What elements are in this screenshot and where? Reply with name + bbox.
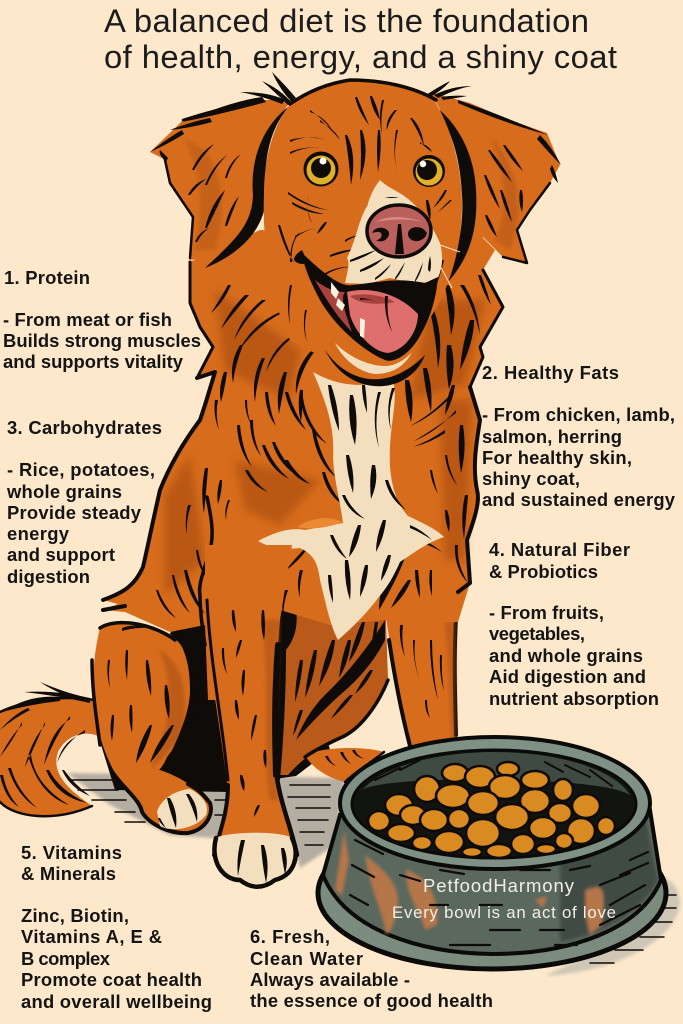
text: 5. Vitamins and Minerals: Zinc, Biotin, [21,905,129,926]
chest white patch [258,372,444,640]
fur strokes [156,392,468,622]
text: 6. Fresh, Clean Water: Clean Water [250,948,363,969]
tail [0,682,98,816]
mouth interior [315,280,352,332]
muzzle [345,180,460,288]
left eye [304,152,338,186]
teeth [331,282,365,338]
back paw [113,770,211,833]
text: 4. Natural Fiber and Probiotics: Aid digestion and [489,666,646,687]
text: 2. Healthy Fats: For healthy skin, [482,447,632,468]
title: of health, energy, and a shiny coat [104,38,617,75]
text: 6. Fresh, Clean Water [250,926,493,1011]
text: 2. Healthy Fats: 2. Healthy Fats [482,362,619,383]
text: 4. Natural Fiber and Probiotics: nutrient absorption [489,688,659,709]
text: 3. Carbohydrates: digestion [7,566,90,587]
text: 4. Natural Fiber and Probiotics: 4. Natural Fiber [489,539,630,560]
text: 2. Healthy Fats: salmon, herring [482,426,622,447]
text: 3. Carbohydrates: Provide steady [7,502,142,523]
text: 3. Carbohydrates: 3. Carbohydrates [7,417,162,438]
text: 1. Protein: Builds strong muscles [3,330,201,351]
belly [272,590,388,780]
title [104,2,617,75]
forehead and cheek fur [278,96,452,342]
body shading [165,290,485,595]
haunch [92,623,197,782]
nose [367,205,431,257]
title: A balanced diet is the foundation [104,2,589,39]
ears [150,92,561,282]
tongue [347,290,418,353]
bowl interior [352,750,636,858]
text: 1. Protein: - From meat or fish [3,309,172,330]
text: 2. Healthy Fats: - From chicken, lamb, [482,404,675,425]
bowl wall [323,810,661,954]
text: 3. Carbohydrates: and support [7,544,115,565]
text: 5. Vitamins and Minerals: 5. Vitamins [21,842,122,863]
text: 5. Vitamins and Minerals: Vitamins A, E & [21,926,162,947]
text: 3. Carbohydrates: energy [7,523,70,544]
bowl base flange [318,817,666,969]
text: 4. Natural Fiber and Probiotics: - From fruits, [489,602,604,623]
text: 3. Carbohydrates: - Rice, potatoes, [7,459,155,480]
text: 4. Natural Fiber and Probiotics: vegetables, [489,623,585,644]
text: 5. Vitamins and Minerals [21,842,212,1012]
hind foot right [305,748,384,782]
text: 1. Protein: and supports vitality [3,351,184,372]
text: 5. Vitamins and Minerals: Promote coat health [21,969,202,990]
text: 3. Carbohydrates: whole grains [6,481,122,502]
bowl brand name: PetfoodHarmony [423,875,575,896]
text: 1. Protein [3,267,201,372]
right ear [430,92,561,282]
text: 6. Fresh, Clean Water: Always available - [250,969,410,990]
head [240,72,472,372]
text: 2. Healthy Fats: and sustained energy [482,489,676,510]
right front leg [385,590,458,748]
text: 5. Vitamins and Minerals: B complex [21,948,111,969]
text: 4. Natural Fiber and Probiotics: & Probiotics [489,561,598,582]
black shadow under body [98,600,330,792]
text: 4. Natural Fiber and Probiotics: and whole grains [489,645,643,666]
torso and neck ruff [103,230,503,700]
chin fur [325,343,425,386]
text: 2. Healthy Fats: shiny coat, [482,468,580,489]
bowl tagline: Every bowl is an act of love [392,903,616,922]
text: 3. Carbohydrates [6,417,162,587]
text: 2. Healthy Fats [482,362,676,510]
front paw [214,833,296,887]
text: 5. Vitamins and Minerals: & Minerals [21,863,116,884]
right eye [413,155,445,187]
text: 6. Fresh, Clean Water: 6. Fresh, [250,926,330,947]
bowl rim [340,737,650,869]
floor shadow [67,773,680,976]
left ear [150,97,292,268]
kibble [368,762,615,858]
food bowl [318,737,666,969]
front left leg [205,545,297,860]
text: 5. Vitamins and Minerals: and overall wellbeing [21,991,212,1012]
open mouth [301,252,438,361]
text: 1. Protein: 1. Protein [4,267,90,288]
text: 6. Fresh, Clean Water: the essence of good health [250,990,493,1011]
text: 4. Natural Fiber and Probiotics [489,539,659,709]
